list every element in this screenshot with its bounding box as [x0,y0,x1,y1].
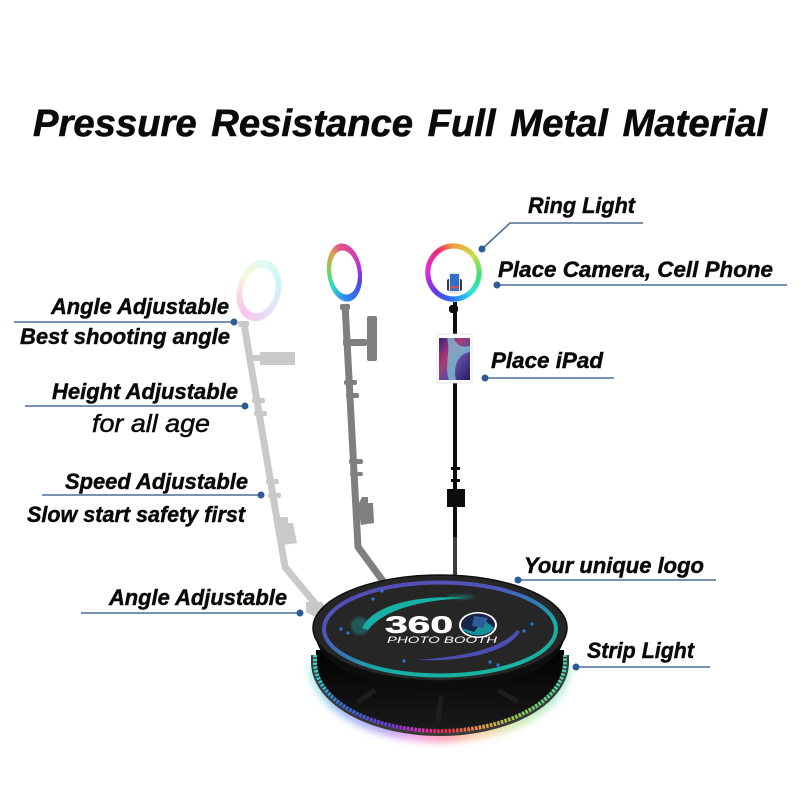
purple swirl [416,630,520,660]
label: strip light: Strip Light [587,638,696,663]
PHOTO BOOTH: PHOTO BOOTH [387,635,498,645]
label: place iPad [482,348,614,382]
label: speed adjustable, slow start: Slow start safety first [27,502,247,527]
blue sparkles [339,589,534,667]
label: ring light: Ring Light [528,193,637,218]
logo circle [459,612,497,638]
iPad [437,334,472,383]
coloured rim ring [324,582,556,676]
label: place camera, cell phone: Place Camera, Cell Phone [498,257,773,282]
label: angle adjustable, best shooting angle: Angle Adjustable [50,294,229,319]
faded stand, far left position [238,321,326,618]
middle ring light [326,243,362,302]
label: height adjustable, for all age: for all age [92,410,210,438]
label: angle adjustable, best shooting angle [14,294,238,349]
label: speed adjustable, slow start [27,469,264,527]
black stand, front position [447,302,465,575]
front ring light [425,243,482,302]
phone on holder [447,272,462,294]
label: angle adjustable, best shooting angle: Best shooting angle [20,324,230,349]
label: your unique logo: Your unique logo [524,553,704,578]
label: ring light [478,193,643,252]
label: height adjustable, for all age [25,379,248,438]
semi-faded stand, middle position [340,304,383,581]
platform top disc [313,575,567,689]
title: Pressure Resistance Full Metal Material [33,103,768,145]
faded ring light [236,260,282,322]
360 logo: 360 [385,612,453,639]
label: place iPad: Place iPad [491,348,604,373]
platform base with LED strip [314,650,566,737]
label: angle adjustable, lower: Angle Adjustable [108,585,287,610]
label: height adjustable, for all age: Height Adjustable [52,379,238,404]
label: strip light [572,638,710,670]
teal swirl [362,597,466,630]
teal speckles [351,594,474,635]
label: angle adjustable, lower [81,585,304,616]
label: speed adjustable, slow start: Speed Adjustable [65,469,248,494]
